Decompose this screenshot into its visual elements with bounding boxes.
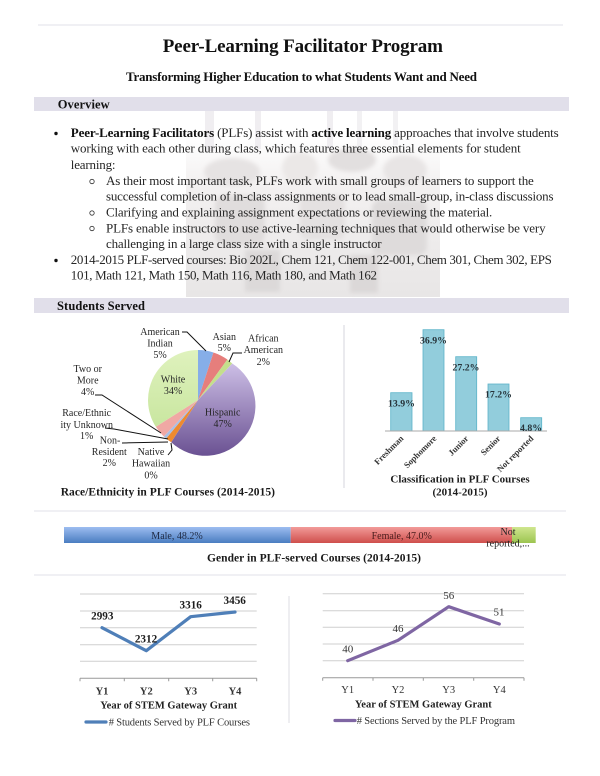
stacked bar: gender: reported,... [486, 538, 530, 550]
pie label: African American: 2% [257, 357, 270, 368]
bar chart caption [390, 474, 530, 498]
bar value labels: 13.9% [388, 398, 415, 410]
pie label: African American: American [244, 345, 283, 356]
axis labels: Y4 [229, 686, 242, 698]
legend: # Sections Served by the PLF Program [357, 716, 515, 727]
stacked bar: gender [64, 527, 536, 550]
bullet list item: PLF description: Peer-Learning Facilitators (PLFs) assist with active learning approaches that involve students [71, 125, 559, 140]
pie label: Non-Resident: Non- [100, 436, 120, 446]
bar chart: classification [372, 330, 547, 474]
sub-bullet: enable instructors [90, 220, 546, 251]
axis labels: Y3 [184, 686, 197, 698]
gender chart caption: Gender in PLF-served Courses (2014-2015) [207, 552, 421, 564]
bullet list item: PLF description: working with each other during class, which features three essential elements for student [71, 140, 521, 156]
section band: Students Served: Students Served [57, 299, 145, 313]
data labels: 46 [392, 623, 404, 635]
pie label: Two or More: 4% [81, 387, 94, 398]
pie label: Race/Ethnicity Unknown: ity Unknown [60, 420, 113, 431]
data labels: 56 [443, 590, 455, 602]
bar category labels: Senior [478, 433, 503, 457]
bar value labels: 4.8% [520, 423, 542, 434]
pie label: White: White [161, 374, 185, 386]
bar value labels: 17.2% [485, 390, 512, 400]
subtitle: Transforming Higher Education to what Students Want and Need [126, 69, 478, 84]
bar value labels: 36.9% [420, 336, 447, 346]
pie label: White: 34% [164, 386, 182, 397]
data line [348, 607, 499, 661]
title: Peer-Learning Facilitator Program [163, 36, 443, 57]
sub-bullet: small groups: As their most important task, PLFs work with small groups of learners to support the [106, 173, 534, 188]
pie label: Two or More: More [77, 376, 99, 387]
axis title: Year of STEM Gateway Grant [355, 700, 492, 710]
pie label: Native Hawaiian: Hawaiian [132, 459, 170, 470]
bar value labels [388, 336, 542, 434]
pie label: American Indian: American [140, 327, 180, 338]
axis labels: Y1 [96, 686, 108, 698]
bullet list item: courses: 2014-2015 PLF-served courses: Bio 202L, Chem 121, Chem 122-001, Chem 301, Chem 302, EPS [71, 252, 552, 267]
sub-bullet: small groups [90, 173, 554, 204]
top rule [38, 24, 563, 26]
axis [385, 430, 547, 432]
data labels: 2312 [135, 634, 158, 646]
pie label: Non-Resident: 2% [103, 458, 116, 469]
axis labels: Y2 [140, 686, 153, 698]
pie label: Two or More: Two or [73, 364, 102, 375]
data labels: 51 [494, 607, 504, 619]
pie leader lines [95, 332, 242, 455]
bars [391, 330, 542, 431]
pie label: Hispanic: 47% [214, 419, 232, 430]
axis labels: Y2 [392, 685, 404, 696]
pie label: African American: African [248, 334, 279, 344]
pie label: Race/Ethnicity Unknown: 1% [80, 431, 93, 442]
axis labels: Y4 [493, 685, 506, 696]
background photo: classroom [186, 111, 440, 297]
data labels [342, 590, 504, 656]
overview text block [54, 125, 559, 282]
bar chart caption: (2014-2015) [432, 486, 488, 498]
sub-bullet: clarifying: Clarifying and explaining assignment expectations or reviewing the material. [106, 204, 492, 220]
data labels: 2993 [91, 610, 114, 622]
bar chart caption: Classification in PLF Courses [390, 474, 530, 486]
pie label: Race/Ethnicity Unknown: Race/Ethnic [62, 408, 111, 419]
stacked bar: gender: Female, 47.0% [372, 531, 432, 542]
pie label: Hispanic: Hispanic [205, 408, 240, 418]
bar value labels: 27.2% [453, 362, 479, 374]
section band: Overview [34, 97, 569, 112]
panel divider [343, 325, 345, 488]
axis labels: Y3 [442, 685, 455, 696]
line chart: sections served [323, 590, 524, 727]
data labels [91, 595, 246, 646]
bullet list item: PLF description: learning: [71, 157, 116, 172]
stacked bar: gender: Male, 48.2% [151, 531, 203, 542]
grid [80, 594, 257, 661]
stacked bar: gender: Not [500, 527, 516, 538]
axis labels [96, 686, 242, 698]
data labels: 3316 [180, 600, 202, 612]
axis title: Year of STEM Gateway Grant [100, 700, 238, 712]
legend: # Students Served by PLF Courses [109, 718, 250, 728]
bar category labels: Sophomore [402, 433, 439, 470]
sub-bullet: enable instructors: PLFs enable instructors to use active-learning techniques that would otherwise be very [106, 220, 546, 236]
axis labels: Y1 [341, 685, 354, 696]
pie slices [148, 350, 255, 456]
bullet list item: courses: 101, Math 121, Math 150, Math 116, Math 180, and Math 162 [71, 268, 377, 282]
grid [323, 594, 524, 661]
pie label: American Indian: 5% [153, 350, 167, 361]
pie label: Non-Resident: Resident [92, 447, 127, 458]
pie label: Native Hawaiian: 0% [144, 470, 158, 481]
bar category labels: Not reported [495, 433, 536, 474]
pie chart caption: Race/Ethnicity in PLF Courses (2014-2015) [61, 486, 275, 498]
data labels: 3456 [224, 595, 246, 607]
section band: Overview: Overview [58, 98, 110, 112]
pie label: Asian: 5% [218, 343, 231, 354]
bullet list item: PLF description [54, 125, 559, 172]
pie label: American Indian: Indian [147, 338, 173, 349]
pie label: Asian: Asian [213, 332, 236, 343]
data labels: 40 [342, 644, 354, 656]
bar category labels: Freshman [372, 433, 406, 467]
bullet list item: courses [54, 252, 552, 282]
pie chart: race/ethnicity [60, 327, 283, 481]
section band: Students Served [34, 298, 569, 313]
line chart: students served [80, 594, 257, 728]
pie label: Native Hawaiian: Native [138, 447, 164, 458]
sub-bullet: small groups: successful completion of in-class assignments or to lead small-group, in-class discussions [106, 188, 554, 204]
sub-bullet: enable instructors: challenging in a large class size with a single instructor [106, 236, 382, 251]
axis labels [341, 685, 506, 696]
bar category labels: Junior [446, 433, 471, 458]
data line [102, 612, 235, 651]
bar category labels [372, 433, 536, 474]
